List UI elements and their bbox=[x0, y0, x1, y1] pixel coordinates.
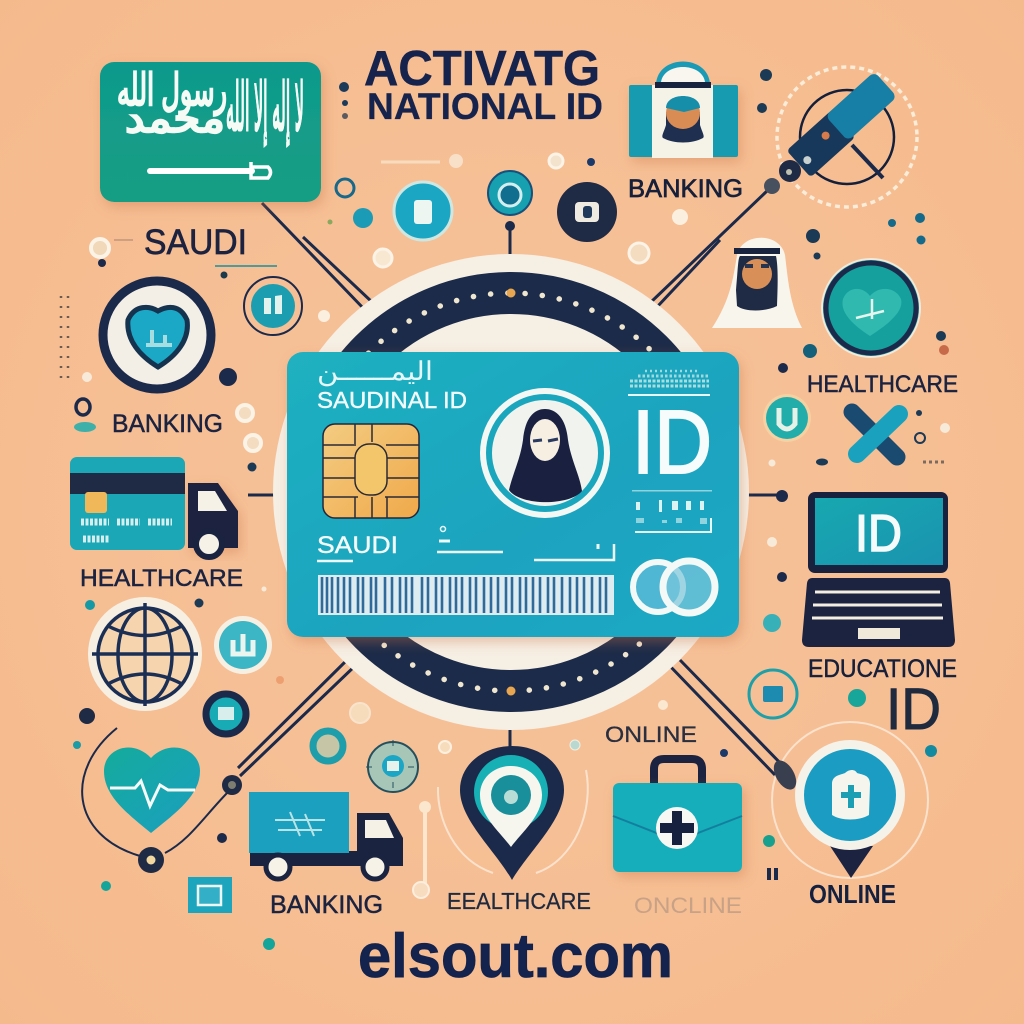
glyph: person mark bbox=[414, 200, 432, 224]
Saudi flag panel bbox=[100, 62, 321, 202]
hand badge bbox=[214, 616, 272, 674]
laptop keyboard bbox=[802, 578, 955, 647]
ONLINE right label: ONLINE bbox=[809, 879, 896, 909]
BANKING bottom label: BANKING bbox=[270, 891, 383, 919]
globe badge bbox=[88, 597, 202, 711]
hologram circles bbox=[633, 561, 715, 613]
connector lines bbox=[238, 190, 787, 776]
card Arabic text: اليمــــــن bbox=[317, 356, 433, 387]
small frame icon bbox=[188, 877, 232, 913]
card title: SAUDINAL ID bbox=[317, 387, 467, 413]
BANKING top right label: BANKING bbox=[628, 175, 743, 203]
badge: small teal circle bbox=[244, 277, 302, 335]
medical bag bbox=[613, 759, 742, 872]
flag Arabic script bbox=[117, 66, 304, 148]
website footer: elsout.com bbox=[358, 922, 673, 991]
portrait badge bbox=[480, 388, 610, 518]
flag Arabic script: رسول الله bbox=[117, 66, 227, 117]
central ring medallion bbox=[273, 254, 749, 730]
delivery truck bbox=[249, 792, 403, 879]
ID card bbox=[287, 352, 739, 637]
node: center top bbox=[488, 171, 532, 231]
location medical badge bbox=[769, 722, 928, 878]
ID label lower right: ID bbox=[886, 677, 941, 742]
SIM chip bbox=[323, 424, 419, 518]
signature lines bbox=[317, 526, 614, 561]
heart pulse icon bbox=[82, 728, 242, 873]
credit card truck left bbox=[70, 457, 238, 557]
scattered decorative dots bbox=[61, 69, 950, 950]
flag Arabic script: محمد bbox=[125, 97, 225, 141]
woman portrait tile bbox=[629, 62, 738, 158]
target badge bottom bbox=[366, 740, 420, 794]
badge: dark camera bbox=[557, 182, 617, 242]
title: ACTIVATG bbox=[364, 42, 600, 96]
healthcare heart medallion right bbox=[822, 259, 920, 357]
laptop ID text: ID bbox=[855, 505, 902, 563]
SAUDI heading: SAUDI bbox=[144, 223, 247, 262]
small badge bottom left bbox=[206, 694, 246, 734]
faint ONLINE label: ONCLINE bbox=[634, 893, 742, 918]
title bbox=[364, 42, 603, 127]
badge: person bbox=[394, 182, 452, 240]
HEALTHCARE label left: HEALTHCARE bbox=[80, 565, 243, 592]
location pin bbox=[460, 746, 564, 880]
pen and target icon bbox=[764, 67, 917, 207]
large ID text: ID bbox=[632, 393, 712, 493]
headscarf person bbox=[712, 238, 802, 328]
small data rows bbox=[632, 490, 712, 532]
laptop bbox=[802, 492, 955, 647]
seal pattern bbox=[628, 371, 710, 395]
HEALTHCARE label right: HEALTHCARE bbox=[807, 371, 958, 398]
ONLINE label above bag: ONLINE bbox=[605, 722, 697, 747]
rod with knobs bbox=[413, 801, 431, 898]
BANKING label left: BANKING bbox=[112, 410, 223, 438]
flag sword bbox=[150, 162, 270, 178]
small teal target bbox=[749, 670, 797, 718]
title: NATIONAL ID bbox=[367, 86, 603, 127]
text: لا إله إلا الله bbox=[226, 70, 304, 148]
EEALTHCARE bottom label: EEALTHCARE bbox=[447, 888, 591, 914]
arcs around pin bbox=[438, 770, 588, 873]
SAUDI label on card: SAUDI bbox=[317, 532, 398, 559]
heart shield medallion left bbox=[103, 281, 211, 389]
barcode bbox=[318, 575, 614, 615]
small badge and crossed bandage right bbox=[763, 394, 899, 457]
EDUCATION label: EDUCATIONE bbox=[808, 655, 957, 683]
small icon badges upper area bbox=[394, 182, 452, 240]
